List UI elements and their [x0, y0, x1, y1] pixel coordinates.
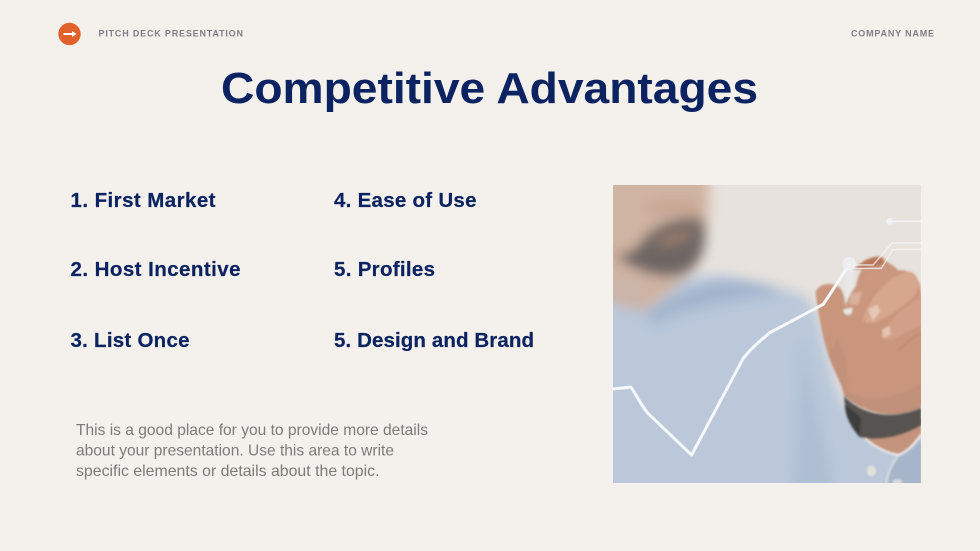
- item: host incentive: 2. Host Incentive: [70, 258, 240, 281]
- watch strap: [844, 396, 921, 439]
- icon: orange arrow badge: [58, 23, 81, 45]
- header label: pitch deck presentation: PITCH DECK PRESENTATION: [98, 28, 243, 38]
- header label: company name: COMPANY NAME: [851, 28, 934, 38]
- wrist: [858, 418, 921, 454]
- description text block: about your presentation. Use this area to write: [76, 442, 394, 460]
- pen: [843, 288, 852, 304]
- advantages list: [70, 189, 534, 352]
- wall: [698, 185, 921, 396]
- hand: [815, 256, 925, 415]
- title: Competitive Advantages: [221, 64, 758, 113]
- photo: man drawing a rising chart: [613, 185, 921, 483]
- description text block: [76, 422, 428, 480]
- description text block: specific elements or details about the topic.: [76, 463, 380, 480]
- item: ease of use: 4. Ease of Use: [334, 189, 476, 212]
- description text block: This is a good place for you to provide more details: [76, 422, 428, 439]
- chart line: [613, 221, 921, 455]
- item: design and brand: 5. Design and Brand: [334, 329, 534, 352]
- item: first market: 1. First Market: [70, 189, 216, 212]
- item: list once: 3. List Once: [70, 329, 190, 352]
- pen tip: [843, 308, 852, 315]
- item: profiles: 5. Profiles: [334, 258, 435, 281]
- blurred man: [613, 185, 921, 483]
- chart nodes: [842, 218, 893, 270]
- cuff and buttons: [865, 434, 921, 488]
